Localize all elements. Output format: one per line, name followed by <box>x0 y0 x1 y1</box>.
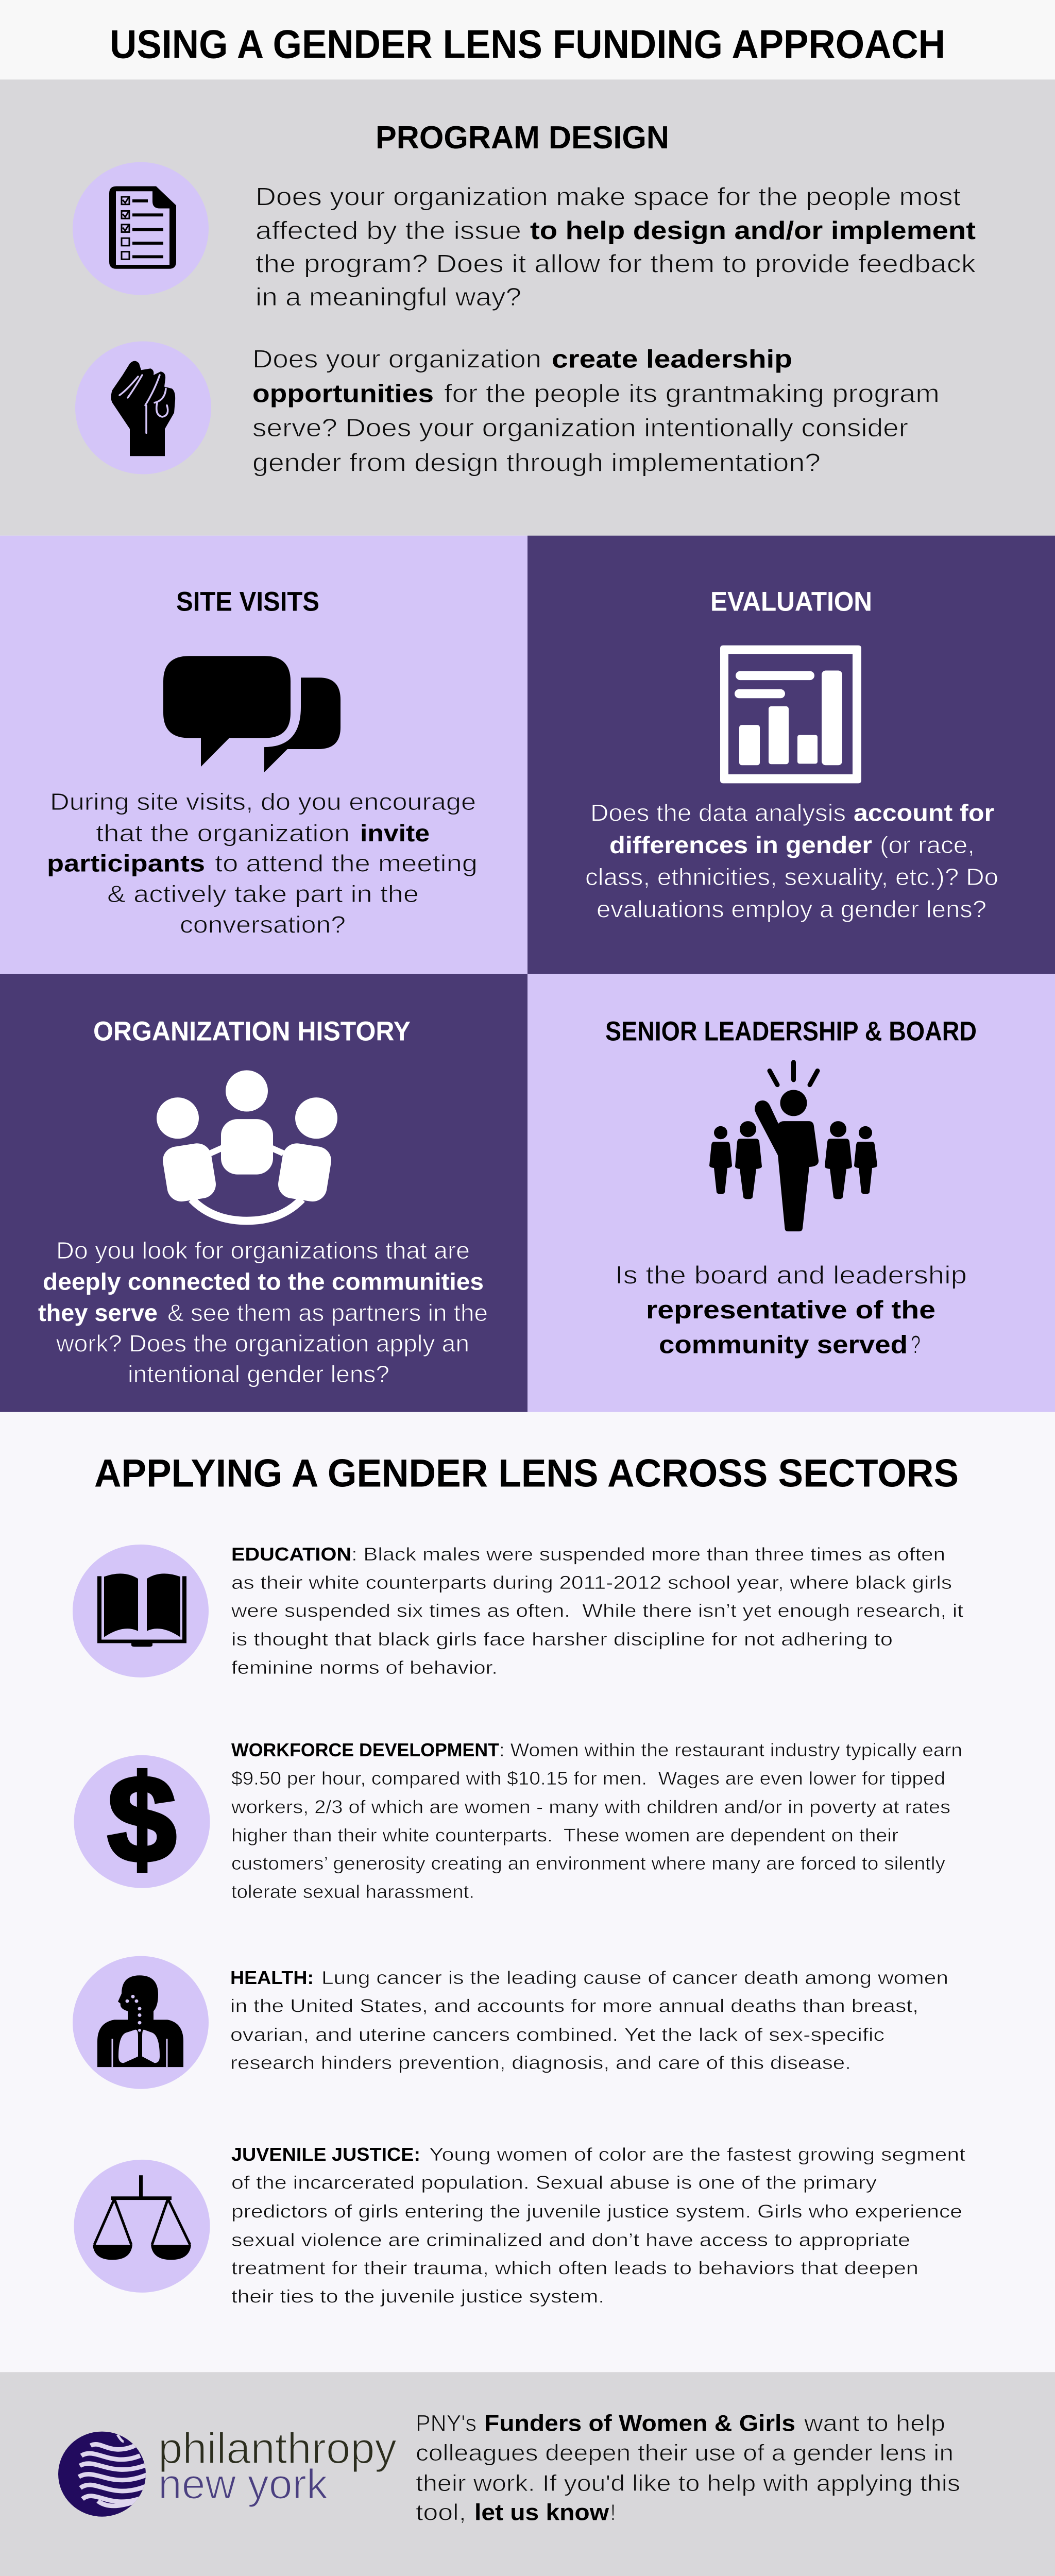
text block: education: is thought that black girls face harsher discipline for not adhering to <box>231 1629 893 1650</box>
text block: organization history question: intentional gender lens? <box>128 1361 389 1387</box>
text block: site visits question: that the organization <box>96 820 350 846</box>
text block: juvenile justice: sexual violence are criminalized and don’t have access to appropriate <box>231 2229 910 2250</box>
text block: education: feminine norms of behavior. <box>231 1657 498 1678</box>
text block: design question: to help design and/or implement <box>530 217 976 245</box>
icon: open book <box>73 1545 209 1677</box>
header band <box>0 0 1055 79</box>
icon: raised fist <box>75 341 211 474</box>
text block: design question: Does your organization make space for the people most <box>256 183 961 211</box>
text block: organization history question: work? Does the organization apply an <box>56 1330 469 1357</box>
text block: health: HEALTH: <box>230 1967 314 1988</box>
text block: leadership question: create leadership <box>552 345 792 373</box>
text block: organization history question <box>38 1237 488 1387</box>
text block: leadership representation question: community served <box>659 1331 908 1359</box>
text block: leadership representation question <box>615 1261 967 1359</box>
text block: site visits question: conversation? <box>180 911 346 938</box>
text block: leadership representation question: ? <box>911 1331 921 1359</box>
text block: education: were suspended six times as often. While there isn’t yet enough research, it <box>231 1600 963 1621</box>
text block: call to action: colleagues deepen their use of a gender lens in <box>416 2440 954 2466</box>
text block: workforce development: WORKFORCE DEVELOPMENT <box>231 1740 499 1760</box>
icon: dollar sign <box>74 1751 210 1888</box>
text block: site visits question: During site visits, do you encourage <box>50 789 476 815</box>
text block: call to action <box>416 2410 960 2525</box>
text block: workforce development <box>231 1740 962 1902</box>
text block: site visits question: & actively take part in the <box>107 881 419 907</box>
panel: sectors <box>0 1412 1055 2372</box>
heading: applying a gender lens across sectors: APPLYING A GENDER LENS ACROSS SECTORS <box>94 1451 959 1495</box>
logo: philanthropy new york: new york <box>158 2460 328 2507</box>
icon: checklist document <box>73 162 209 295</box>
text block: call to action: want to help <box>804 2410 945 2436</box>
text block: workforce development: customers’ generosity creating an environment where many are forced to silently <box>231 1853 946 1874</box>
text block: organization history question: deeply connected to the communities <box>43 1268 484 1295</box>
text block: juvenile justice: predictors of girls entering the juvenile justice system. Girls who experience <box>231 2201 962 2222</box>
text block: design question: affected by the issue <box>256 217 521 245</box>
panel: evaluation <box>528 536 1055 974</box>
panel: footer <box>0 2372 1055 2576</box>
text block: education <box>231 1544 963 1678</box>
icon: people around a table <box>157 1070 337 1221</box>
text block: juvenile justice: treatment for their trauma, which often leads to behaviors that deepen <box>231 2258 918 2279</box>
text block: leadership question: gender from design through implementation? <box>252 449 821 477</box>
text block: evaluation question: (or race, <box>880 832 975 858</box>
text block: workforce development: $9.50 per hour, compared with $10.15 for men. Wages are even lower for tipped <box>231 1768 945 1789</box>
icon: dollar sign: $ <box>108 1751 176 1888</box>
text block: evaluation question: class, ethnicities, sexuality, etc.)? Do <box>585 863 998 890</box>
heading: senior leadership and board: SENIOR LEADERSHIP & BOARD <box>605 1016 977 1047</box>
heading: site visits: SITE VISITS <box>176 587 319 617</box>
icon: leader with raised arm among group <box>709 1062 877 1231</box>
text block: site visits question: participants <box>47 850 205 876</box>
icon: balance scales <box>74 2160 210 2293</box>
panel: organization history <box>0 974 528 1412</box>
text block: leadership representation question: representative of the <box>646 1296 935 1324</box>
text block: organization history question: they serve <box>38 1299 158 1326</box>
text block: call to action: ! <box>610 2499 616 2525</box>
icon: respiratory system <box>73 1956 209 2089</box>
text block: design question: in a meaningful way? <box>256 283 521 311</box>
text block: call to action: tool, <box>416 2499 466 2525</box>
text block: leadership question: for the people its grantmaking program <box>444 380 940 408</box>
text block: leadership question: opportunities <box>252 380 434 408</box>
text block: leadership representation question: Is the board and leadership <box>615 1261 967 1290</box>
text block: evaluation question: account for <box>854 800 994 826</box>
text block: health <box>230 1967 948 2073</box>
text block: workforce development: higher than their white counterparts. These women are dependent on their <box>231 1825 898 1845</box>
text block: organization history question: & see them as partners in the <box>167 1299 488 1326</box>
text block: education: EDUCATION <box>231 1544 351 1565</box>
text block: education: : Black males were suspended more than three times as often <box>351 1544 945 1565</box>
text block: health: Lung cancer is the leading cause of cancer death among women <box>321 1967 948 1988</box>
panel: program design <box>0 79 1055 536</box>
panel: site visits <box>0 536 528 974</box>
text block: leadership question: Does your organization <box>252 345 541 373</box>
text block: health: in the United States, and accounts for more annual deaths than breast, <box>230 1995 918 2016</box>
text block: site visits question <box>47 789 478 938</box>
logo: philanthropy new york: philanthropy <box>158 2425 397 2473</box>
text block: design question: the program? Does it allow for them to provide feedback <box>256 250 976 278</box>
text block: site visits question: invite <box>360 820 430 846</box>
heading: program design: PROGRAM DESIGN <box>376 120 669 156</box>
text block: evaluation question: evaluations employ a gender lens? <box>597 896 986 922</box>
title: USING A GENDER LENS FUNDING APPROACH <box>110 21 945 66</box>
panel: senior leadership and board <box>528 974 1055 1412</box>
text block: health: ovarian, and uterine cancers combined. Yet the lack of sex-specific <box>230 2024 884 2045</box>
text block: evaluation question <box>585 800 998 922</box>
text block: site visits question: to attend the meeting <box>215 850 478 876</box>
text block: call to action: PNY's <box>416 2410 477 2436</box>
text block: evaluation question: differences in gender <box>609 832 872 858</box>
text block: juvenile justice: of the incarcerated population. Sexual abuse is one of the primary <box>231 2172 877 2193</box>
text block: juvenile justice: their ties to the juvenile justice system. <box>231 2286 604 2307</box>
text block: workforce development: workers, 2/3 of which are women - many with children and/or in poverty at rates <box>231 1797 950 1818</box>
text block: juvenile justice: Young women of color are the fastest growing segment <box>429 2144 965 2165</box>
icon: speech bubbles <box>163 656 341 772</box>
icon: bar chart report <box>720 646 861 783</box>
text block: workforce development: : Women within the restaurant industry typically earn <box>499 1740 962 1760</box>
heading: organization history: ORGANIZATION HISTORY <box>93 1016 411 1047</box>
text block: leadership question: serve? Does your organization intentionally consider <box>252 414 908 442</box>
text block: juvenile justice: JUVENILE JUSTICE: <box>231 2144 420 2165</box>
text block: health: research hinders prevention, diagnosis, and care of this disease. <box>230 2052 851 2073</box>
text block: call to action: let us know <box>474 2499 609 2525</box>
text block: education: as their white counterparts during 2011-2012 school year, where black girls <box>231 1572 952 1593</box>
text block: design question <box>256 183 976 311</box>
text block: call to action: Funders of Women & Girls <box>484 2410 795 2436</box>
text block: juvenile justice <box>231 2144 965 2307</box>
text block: evaluation question: Does the data analysis <box>590 800 846 826</box>
text block: call to action: their work. If you'd like to help with applying this <box>416 2470 960 2496</box>
text block: workforce development: tolerate sexual harassment. <box>231 1881 474 1902</box>
text block: organization history question: Do you look for organizations that are <box>56 1237 470 1264</box>
logo: philanthropy new york <box>58 2425 397 2517</box>
heading: evaluation: EVALUATION <box>710 587 872 617</box>
text block: leadership question <box>252 345 940 477</box>
